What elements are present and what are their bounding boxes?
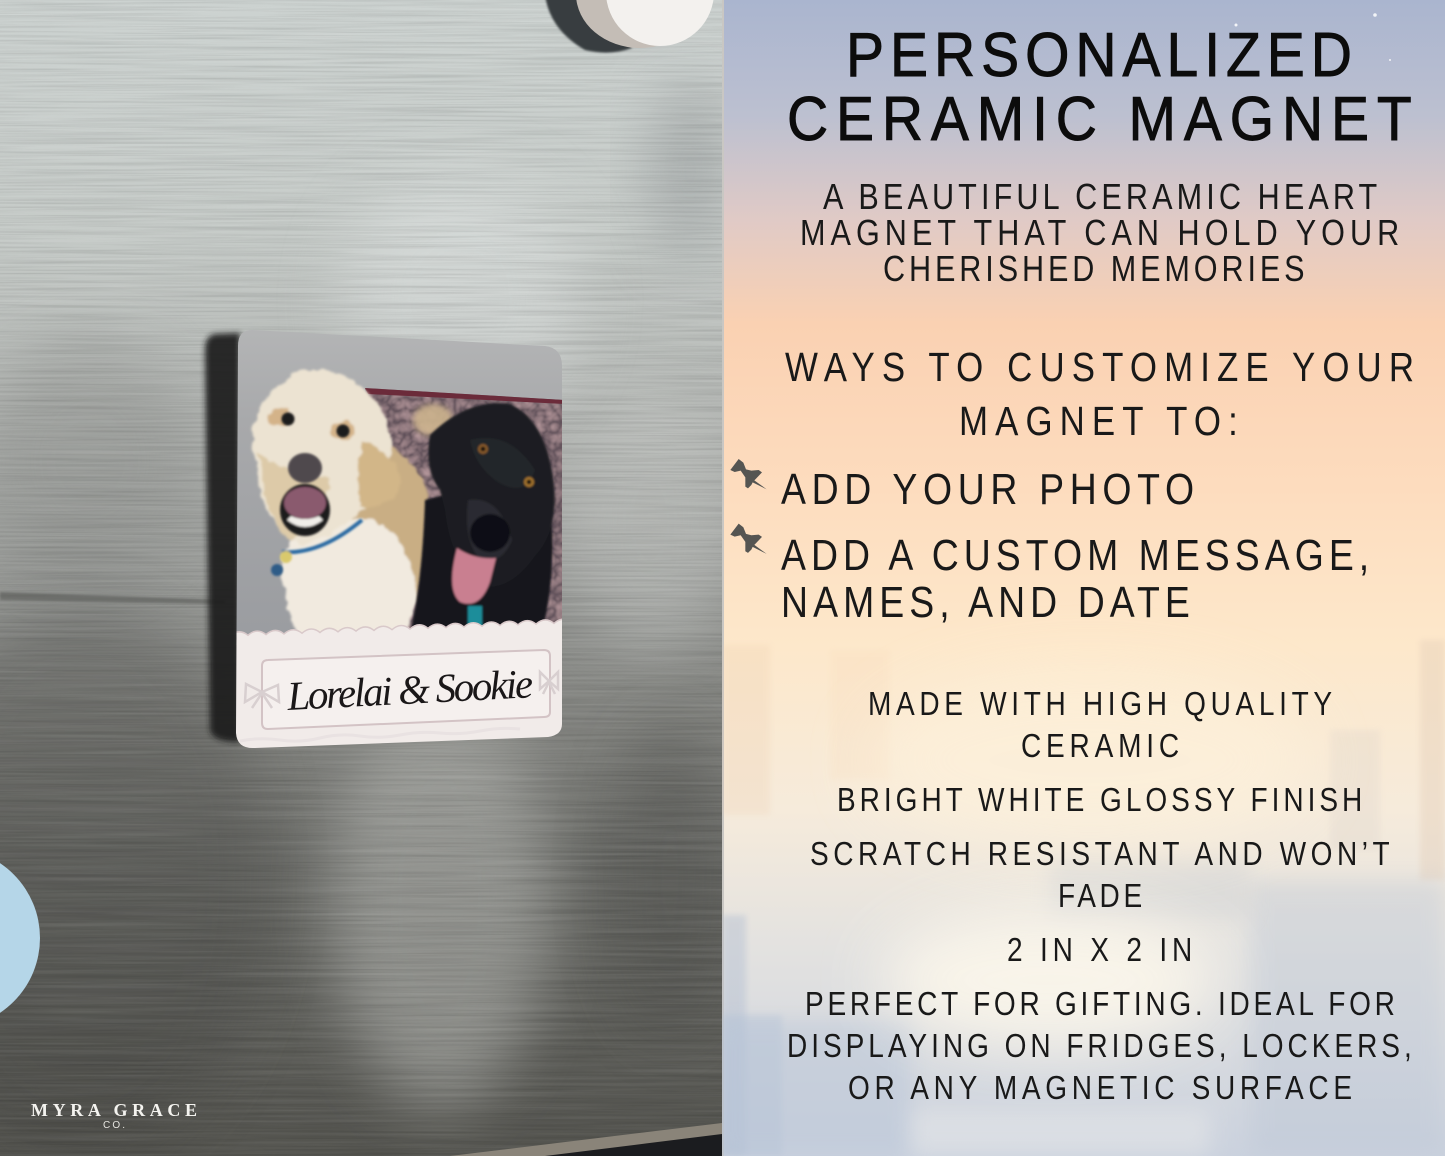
subtitle	[802, 184, 1398, 282]
magnet shadow	[205, 333, 240, 742]
name plate frame	[262, 650, 550, 729]
icon: push pin 1	[730, 459, 767, 489]
feature: size: 2 IN X 2 IN	[1007, 932, 1192, 969]
logo: Myra Grace Co.: MYRA GRACE	[31, 1100, 197, 1120]
title: CERAMIC MAGNET	[787, 84, 1412, 154]
bullet: add a custom message: ADD A CUSTOM MESSAGE,	[781, 530, 1369, 580]
feature: high quality ceramic: MADE WITH HIGH QUALITY	[868, 686, 1332, 723]
icon: push pin 2	[730, 524, 767, 554]
name text: Lorelai & Sookie	[285, 660, 534, 719]
bullet: add your photo: ADD YOUR PHOTO	[781, 464, 1194, 514]
title: PERSONALIZED	[846, 20, 1352, 90]
logo: Myra Grace Co.	[31, 1104, 196, 1128]
icon: round white magnet at top	[545, 0, 714, 53]
feature: scratch resistant: SCRATCH RESISTANT AND WON’T	[810, 836, 1390, 873]
icon: left ribbon bow	[245, 684, 279, 708]
scalloped caption banner	[236, 618, 562, 748]
subtitle: MAGNET THAT CAN HOLD YOUR	[800, 214, 1399, 254]
subtitle: A BEAUTIFUL CERAMIC HEART	[823, 178, 1377, 218]
feature: high quality ceramic: CERAMIC	[1021, 728, 1179, 765]
patterned rug	[365, 388, 562, 628]
white dog face details	[271, 412, 362, 576]
watercolor city silhouettes	[722, 640, 1445, 1156]
feature: scratch resistant	[811, 842, 1389, 907]
feature: high quality ceramic	[870, 692, 1332, 758]
heading: ways to customize	[785, 352, 1412, 436]
heading: ways to customize: MAGNET TO:	[959, 399, 1238, 445]
lower lace edge	[240, 728, 520, 741]
ceramic photo magnet	[230, 325, 572, 760]
decorative stars	[1234, 13, 1391, 61]
feature: perfect for gifting	[789, 992, 1410, 1100]
subtitle: CHERISHED MEMORIES	[883, 250, 1305, 290]
feature: perfect for gifting: PERFECT FOR GIFTING. IDEAL FOR	[805, 986, 1395, 1023]
panel: stainless steel fridge photo	[0, 0, 740, 1156]
feature: perfect for gifting: OR ANY MAGNETIC SURFACE	[848, 1070, 1352, 1107]
icon: right ribbon bow	[540, 672, 558, 694]
logo: Myra Grace Co.: CO.	[103, 1120, 125, 1131]
feature: glossy finish: BRIGHT WHITE GLOSSY FINISH	[837, 782, 1362, 819]
icon: round blue magnet at left	[0, 863, 40, 1013]
heading: ways to customize: WAYS TO CUSTOMIZE YOUR	[785, 345, 1414, 391]
fridge bottom edge	[450, 1123, 722, 1156]
photo background	[230, 325, 570, 645]
title	[790, 32, 1411, 141]
feature: scratch resistant: FADE	[1058, 878, 1142, 915]
white doodle dog	[252, 368, 432, 636]
bullet: add a custom message: NAMES, AND DATE	[781, 577, 1190, 627]
bullet: add a custom message	[781, 540, 1366, 622]
seam line on steel	[0, 592, 225, 604]
feature: perfect for gifting: DISPLAYING ON FRIDGES, LOCKERS,	[787, 1028, 1412, 1065]
panel: watercolor sky background	[722, 0, 1445, 1156]
black labrador dog	[408, 403, 555, 640]
